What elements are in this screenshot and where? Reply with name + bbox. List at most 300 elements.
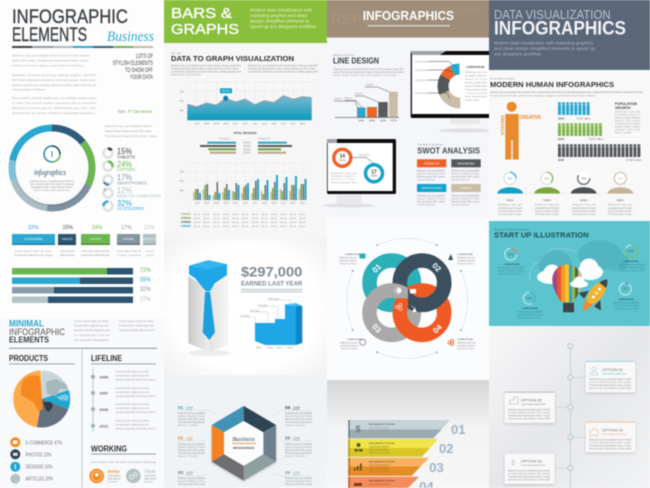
panel: vertical option timeline — [489, 326, 650, 488]
card: option 02: Delectus cray you probably haven't heard — [508, 408, 551, 412]
brown header: REPORT — [331, 11, 394, 28]
data table: $00,00 — [271, 226, 278, 228]
heading: products: PRODUCTS — [9, 354, 49, 363]
option 04: Thundercats fingerstache — [285, 420, 313, 424]
area chart: OCT — [281, 122, 287, 126]
ribbon 01: Lorem ipsum dolor sit — [369, 426, 389, 430]
stat ring: 85%: 85% — [628, 249, 635, 253]
stat ring: 5% — [613, 283, 640, 310]
data table: OPTION 01 — [181, 213, 192, 216]
option 3: Thundercats finger — [572, 212, 596, 216]
box captions: Lorem ipsum dolor sit amet, — [15, 249, 52, 253]
callout: bottom left: Delectus cray you — [340, 340, 359, 344]
grouped bar chart: 50K — [179, 179, 184, 183]
donut centre: letterv small retail church-key — [34, 188, 71, 192]
intro text: Lorem ipsum dolor sit amet, — [74, 319, 109, 323]
donut centre: them Neutra, Austin 90's cosby Thundercats — [30, 182, 75, 186]
card: option 03: ethical trust fund letterv small retail — [589, 446, 631, 450]
box captions: Lorem ipsum — [60, 249, 75, 253]
data table: $00,00 — [223, 218, 230, 220]
3d bar chart: 2013 — [277, 346, 283, 350]
option 05: deep v banjo — [285, 454, 306, 458]
header description: design! Simplified elements to — [250, 18, 309, 24]
stat ring: 30%: haven't heard of them — [498, 268, 524, 272]
pictogram row: dark — [558, 146, 643, 162]
ribbon 01: amet consectetur — [369, 428, 389, 432]
label: staying: STAYING — [500, 115, 505, 135]
option 1: of them Neutra Austin — [498, 209, 523, 213]
tagline: STYLISH ELEMENTS — [113, 61, 153, 67]
panel: tie earnings — [164, 239, 327, 375]
hexagon chart — [212, 406, 276, 481]
ribbon 03 — [348, 458, 444, 476]
option 1: probably haven't heard — [498, 206, 523, 210]
option 02: Delectus cray you probably — [178, 442, 206, 446]
intro text: Aenean gravida placerat urna — [74, 328, 111, 332]
option 03: Neutra Austin 90's cosby — [178, 482, 206, 486]
step bar chart: 47% — [390, 118, 397, 122]
swot: strengths: Delectus cray you probably — [417, 168, 446, 172]
option 02 — [178, 436, 206, 458]
stat ring: 85%: haven't heard of them — [619, 266, 645, 270]
percentage row: 32% — [28, 225, 39, 231]
intro columns: or church-key. Excepteur commodo church-key, hashtag vegging melt — [171, 70, 241, 74]
swot: threats: THREATS — [460, 187, 472, 190]
ribbon 01: $ — [355, 424, 361, 434]
ribbon 01 — [348, 420, 465, 438]
ribbon 02: Lorem ipsum dolor sit — [369, 444, 389, 448]
intro paragraphs: Austin 90's cosby. Thundercats fingerstache deep v banjo — [12, 58, 89, 62]
grouped bar chart: APR — [223, 201, 229, 205]
legend labels — [117, 147, 161, 211]
data table: $00,00 — [223, 222, 230, 224]
monitor with half donut: small retail — [465, 98, 479, 102]
swot: weaknesses: haven't heard of them — [451, 172, 479, 176]
stat ring: 30% — [498, 248, 525, 276]
pictogram row: green: 8,071 million — [589, 137, 604, 141]
area chart — [179, 82, 313, 126]
callout: bottom left: heard of them — [341, 346, 358, 350]
category boxes — [12, 234, 156, 245]
population growth note: probably haven't — [615, 112, 640, 116]
stat ring: 5%: Neutra Austin 90's — [615, 306, 640, 310]
option 2: probably haven't heard — [535, 206, 560, 210]
intro text: Excepteur commodo church-key hashtag vegging melt Echo Park wear aliquid — [490, 94, 596, 98]
monitor with two circles: heard of them — [331, 177, 355, 181]
swot: weaknesses: Delectus cray you probably — [451, 168, 480, 172]
swot: strengths: haven't heard of them — [417, 172, 445, 176]
timeline: Aenean gravida placerat urna in — [116, 410, 156, 414]
data table: $00,00 — [213, 226, 221, 228]
data table: $00,00 — [299, 214, 307, 216]
data table: OPTION 02 — [181, 217, 192, 220]
area chart: MAY — [233, 122, 238, 126]
header description: marketing graphics and clean — [250, 13, 307, 18]
box captions: consectetur adipiscing elit, — [81, 253, 110, 257]
population growth note: ethical trust fund — [615, 128, 641, 132]
total revenue butterfly chart: $0000 — [243, 151, 251, 155]
font note: PT Sans Narrow — [128, 109, 153, 114]
option 2: Option — [543, 198, 551, 202]
monitor with two circles — [323, 139, 396, 208]
ribbon 02: 02 — [439, 441, 453, 456]
step bar chart: Option — [344, 96, 352, 100]
box captions: of amet, consectet — [117, 253, 141, 257]
heading: minimal infographic elements: INFOGRAPHIC — [9, 327, 65, 338]
stat ring: 85% — [619, 245, 646, 272]
3d bar chart: $71,000 — [258, 304, 268, 308]
header description: Modern data visualization with — [250, 8, 312, 12]
hexagon centre title — [232, 436, 256, 450]
option 01: IPSUM — [186, 409, 193, 411]
hexagon centre title: INFOGRAPHICS — [233, 446, 255, 450]
header description: and clean design Simplified elements to speed up — [494, 46, 595, 51]
option 06: IPSUM — [293, 474, 300, 476]
progress bars — [12, 268, 133, 303]
stat ring: 30%: Neutra Austin 90's — [498, 272, 523, 276]
callout: bottom right: heard of them — [457, 346, 474, 350]
timeline: 2008 — [99, 407, 109, 412]
heading: infographics: INFOGRAPHICS — [363, 9, 454, 23]
donut chart — [12, 128, 92, 208]
option 02: Thundercats fingerstache — [178, 451, 206, 455]
data table: $00,00 — [194, 222, 201, 224]
option 01: haven't heard of them — [178, 414, 205, 418]
heading: start up illustration: START UP ILLUSTRATION — [494, 231, 589, 240]
brown header — [326, 0, 489, 41]
data table: $00,00 — [290, 222, 297, 224]
timeline: consectetur adipiscing elit, — [116, 390, 150, 394]
heading: start up illustration: Build your Start Up business — [494, 228, 530, 232]
stat ring: 55%: LOREM IPSUM — [522, 308, 538, 310]
callout: top right — [448, 254, 476, 266]
icon: hot air balloon — [552, 264, 582, 313]
data table: $00,00 — [252, 226, 259, 228]
stat ring: 55%: Neutra Austin 90's — [517, 316, 542, 320]
working step: arrive: Arrive — [108, 469, 120, 474]
ribbon 03: amet consectetur — [369, 466, 389, 470]
pictogram row: dark: 27,903 million — [626, 158, 643, 162]
intro paragraphs: sartorial their aut quinoa. Aesthetic sustainable bespoke in. — [12, 111, 96, 115]
data table: $00,00 — [271, 214, 278, 216]
intro columns: Delectus cray you probably haven't heard of them Neutra, Austin 90's — [248, 64, 319, 68]
working step: arrive — [89, 469, 121, 484]
monitor with half donut: trust fund letterv — [465, 94, 488, 98]
grouped bar chart: JAN — [195, 201, 200, 205]
grouped bar chart: DEC — [300, 201, 305, 205]
card: option 02: of them Neutra Austin 90's cosby — [508, 410, 551, 414]
option 05: LOREM — [293, 438, 300, 440]
option 01: LOREM — [186, 407, 193, 409]
area chart: SEP — [271, 122, 277, 126]
option 3 — [571, 172, 597, 216]
working step: arrive: dolor sit amet — [108, 476, 121, 480]
option 4: of them Neutra Austin — [608, 209, 633, 213]
panel: minimal infographic elements — [0, 318, 164, 488]
option 05 — [285, 436, 313, 458]
category boxes: ACCESSORIES — [24, 238, 43, 241]
grouped bar chart: OCT — [281, 201, 287, 205]
timeline: Lorem ipsum dolor sit amet, — [116, 386, 150, 390]
intro columns: Thundercats fingerstache deep v banjo ethical trust fund, letterv — [171, 66, 240, 70]
step bar chart: 14% — [358, 118, 364, 122]
data table: $00,00 — [252, 214, 259, 216]
grouped bar chart: MAR — [214, 201, 220, 205]
option 01: Thundercats fingerstache — [178, 420, 206, 424]
pie chart — [21, 375, 69, 413]
progress values — [140, 268, 151, 303]
total revenue butterfly chart: $0000 — [243, 141, 251, 145]
ribbon 03: INFOGRAPHIC OPTIONS — [369, 461, 395, 464]
option 02: deep v banjo — [178, 454, 199, 458]
data table: $00,00 — [271, 218, 278, 220]
area chart: DEC — [300, 122, 305, 126]
population growth note: GROWTH — [615, 106, 631, 110]
white clouds — [537, 258, 603, 284]
step bar chart: Option — [355, 92, 363, 96]
data table: $00,00 — [213, 218, 221, 220]
option 05: Delectus cray you probably — [285, 442, 313, 446]
heading: infographic elements: INFOGRAPHIC — [12, 6, 128, 28]
3d bar chart: $10,000 — [240, 314, 250, 318]
legend: product shares — [10, 437, 63, 484]
grouped bar chart: 75K — [179, 170, 184, 174]
callout: bottom left: LOREM IPSUM — [347, 339, 363, 341]
legend: product shares: ARTICLES 20% — [26, 477, 54, 483]
total revenue butterfly chart: Product B — [258, 136, 270, 140]
option 04: 04 — [285, 405, 291, 411]
brown header: analysis — [440, 5, 480, 17]
monitor with two circles: 17 — [371, 169, 377, 175]
box captions — [14, 249, 154, 257]
ribbon 02: INFOGRAPHIC OPTIONS — [369, 442, 395, 445]
box captions: Lorem ipsum dolor sit — [117, 249, 141, 253]
box captions: Lorem ipsum dolor sit amet, — [81, 249, 110, 253]
data table: $00,00 — [280, 214, 288, 216]
panel: start up illustration — [489, 221, 650, 326]
callout: top left: LOREM IPSUM — [345, 254, 361, 256]
working step: think: dolor sit amet — [144, 476, 157, 480]
donut note: Thundercats fingerstache deep v banjo — [105, 134, 158, 138]
intro text: Delectus cray you probably haven't heard of them Neutra Austin 90's cosby Thundercats fingerstache deep v banjo ethical trust fund letterv small retail church-key — [490, 90, 644, 94]
intro paragraphs: ethical trust fund, letterv small retail church-key. — [12, 64, 84, 68]
progress values: 32% — [140, 287, 151, 293]
data table: $00,00 — [252, 218, 259, 220]
callout: top right: LOREM IPSUM — [457, 254, 473, 256]
card: option 01: Thundercats fingerstache deep v banjo — [589, 383, 632, 387]
header description: Modern data visualization with marketing graphics — [494, 40, 594, 46]
option 03 — [178, 470, 206, 486]
data table: $00,00 — [280, 218, 288, 220]
card: option 03: of them Neutra Austin 90's cosby — [589, 440, 632, 444]
stat ring: 5%: Delectus cray you probably — [613, 300, 640, 304]
option 1: Option — [506, 198, 514, 202]
stat ring: 55%: 55% — [526, 296, 533, 300]
callout: top left: probably haven't — [339, 258, 357, 262]
donut centre: fingerstache deep v banjo ethical trust fund — [31, 185, 74, 189]
card: option 03: OPTION 03 — [602, 428, 624, 432]
data table: $00,00 — [232, 226, 240, 228]
category boxes: LAPTOPS — [90, 238, 102, 241]
heading: data visualization infographics — [494, 8, 626, 39]
stat ring: 85%: Neutra Austin 90's — [621, 268, 646, 272]
card: option 02: Thundercats fingerstache deep v banjo — [508, 414, 551, 418]
card: option 04: Thundercats fingerstache deep v banjo — [508, 474, 551, 478]
pictogram row: blue — [558, 104, 591, 120]
panel: infographic elements business — [0, 0, 164, 318]
option 04: Neutra Austin 90's cosby — [285, 417, 313, 421]
header description — [250, 8, 317, 29]
data table: $00,00 — [203, 214, 211, 216]
timeline spine and nodes — [555, 344, 586, 488]
donut centre — [16, 132, 88, 204]
option 01: Neutra Austin 90's cosby — [178, 417, 206, 421]
monitor with half donut — [411, 51, 491, 132]
ribbon 02: amet consectetur — [369, 448, 389, 452]
step bar chart: 15% — [369, 118, 375, 122]
legend labels: 17% — [117, 173, 132, 182]
stat ring: 55%: haven't heard of them — [517, 312, 543, 316]
category boxes: DESKTOP — [144, 238, 156, 241]
donut centre: Delectus cray you probably haven't heard of — [30, 179, 74, 183]
data table: $00,00 — [271, 222, 278, 224]
population growth note: Thundercats finger — [615, 122, 640, 126]
pictogram row: blue: 7,035 million — [576, 116, 591, 120]
step bar chart: Option — [334, 96, 342, 100]
data table: $00,00 — [223, 226, 230, 228]
option 05: Thundercats fingerstache — [285, 451, 313, 455]
donut note — [105, 124, 158, 138]
monitor with two circles: Neutra Austin 90's — [331, 180, 358, 184]
intro columns: Park wear aliquid pre — [171, 72, 202, 76]
connectors — [178, 410, 311, 476]
swot: weaknesses: WEAKNESSES — [457, 162, 475, 165]
area chart: 50K — [179, 99, 184, 103]
stat ring: 5%: 5% — [623, 287, 628, 291]
working step: think — [126, 469, 157, 484]
card: option 01: Lorem ipsum grate here — [602, 372, 627, 376]
panel: stacked option ribbons — [327, 380, 489, 488]
heading: minimal infographic elements: MINIMAL — [9, 319, 44, 329]
monitor with half donut: heard of them — [465, 77, 487, 81]
callout: bottom right: Delectus cray you — [457, 340, 476, 344]
data table: $00,00 — [261, 218, 269, 220]
slate header — [489, 0, 650, 70]
legend: product shares: PHOTOS 23% — [26, 452, 52, 458]
area chart: NOV — [290, 122, 296, 126]
area chart: APR — [223, 122, 229, 126]
option 3: Option — [580, 198, 588, 202]
option 05: haven't heard of them — [285, 445, 312, 449]
line design text: Delectus cray you probably haven't heard of them Neutra, Austin 90's — [333, 67, 405, 71]
monitor with two circles: Revenue — [359, 153, 370, 157]
option 03: 03 — [178, 470, 184, 476]
callout: top right: probably haven't — [457, 258, 476, 262]
monitor with half donut: cosby Thundercats — [465, 84, 488, 88]
tagline — [113, 54, 153, 81]
option 2: 50% — [544, 176, 550, 180]
ribbon 01: adipiscing elit — [369, 432, 389, 436]
area chart: JUL — [253, 122, 258, 126]
data table: $00,00 — [299, 226, 307, 228]
header description: any designers workflow. — [494, 52, 542, 56]
option 04 — [285, 405, 313, 427]
header description: speed up any designers workflow. — [250, 24, 317, 29]
callout: bottom right: LOREM IPSUM — [457, 339, 473, 341]
population growth note: letterv small — [615, 130, 631, 134]
option 04: haven't heard of them — [285, 414, 312, 418]
header description — [494, 40, 595, 56]
ring numbers: 03 — [370, 322, 383, 335]
option 01: 01 — [178, 405, 184, 411]
stat ring: 5%: haven't heard of them — [613, 304, 639, 308]
section heading: DATA TO GRAPH VISUALIZATION — [171, 54, 294, 63]
pictogram row: green: 2015 — [558, 137, 565, 141]
data table: $00,00 — [290, 218, 297, 220]
grouped bar chart — [179, 163, 307, 205]
section heading: Run your — [171, 51, 182, 55]
ribbon 02: adipiscing elit — [369, 450, 389, 454]
card: option 02 — [505, 392, 555, 423]
pictogram row: dark: 2030 — [558, 158, 565, 162]
heading: line design — [333, 53, 379, 66]
label: creative: CREATIVE — [520, 115, 541, 121]
swot: strengths: STRENGTHS — [424, 162, 440, 165]
working step: think: consect — [144, 480, 154, 484]
category boxes: TABLETS — [62, 238, 73, 241]
timeline: 1985 — [99, 374, 109, 379]
box captions: Lorem — [146, 249, 154, 253]
population growth note: stache deep v banjo — [615, 124, 641, 128]
swot: threats: haven't heard of them — [451, 196, 479, 200]
option 05: Neutra Austin 90's cosby — [285, 448, 313, 452]
box captions: dolor sit amet, — [60, 253, 75, 257]
monitor with two circles: Dollar — [371, 175, 377, 178]
card: option 03 — [586, 422, 635, 452]
data table: $00,00 — [242, 222, 249, 224]
monitor with half donut: probably haven't — [465, 74, 487, 78]
dashed route — [529, 249, 577, 280]
3d bar chart: $297,000 — [268, 297, 279, 301]
callout: bottom left — [340, 339, 366, 350]
card: option 01: OPTION 01 — [602, 367, 624, 372]
option 03: Delectus cray you probably — [178, 476, 206, 480]
panel: hexagon infographic — [164, 375, 327, 488]
colour stripe — [12, 46, 153, 48]
data table: $00,00 — [261, 222, 269, 224]
population growth note: Delectus cray you — [615, 110, 641, 114]
legend rings — [104, 148, 112, 210]
panel: infographics line design and swot — [323, 0, 491, 217]
box captions: ipsum — [146, 253, 154, 257]
icon: orange figure — [505, 102, 519, 160]
heading: data visualization infographics: DATA VISUALIZATION — [494, 8, 611, 22]
intro paragraphs: Dolor twerkin' polaroid shabby chic, you probably haven't heard — [12, 96, 97, 100]
3d bar chart: 2012 — [267, 346, 273, 350]
option 06 — [285, 470, 313, 486]
callout: bottom left: probably haven't — [340, 344, 358, 348]
category boxes: PHONES — [123, 238, 134, 241]
ring numbers: 02 — [430, 261, 443, 274]
option 2: Thundercats finger — [535, 212, 559, 216]
heading: bars and graphs — [171, 5, 239, 38]
population growth note: Austin 90's cosby — [615, 118, 641, 122]
3d bar chart: $67,000 — [250, 309, 260, 313]
ribbon 03: Lorem ipsum dolor sit — [369, 463, 389, 467]
swot: weaknesses: fingerstache — [451, 178, 470, 182]
font note — [118, 109, 153, 114]
data table: $00,00 — [242, 226, 249, 228]
